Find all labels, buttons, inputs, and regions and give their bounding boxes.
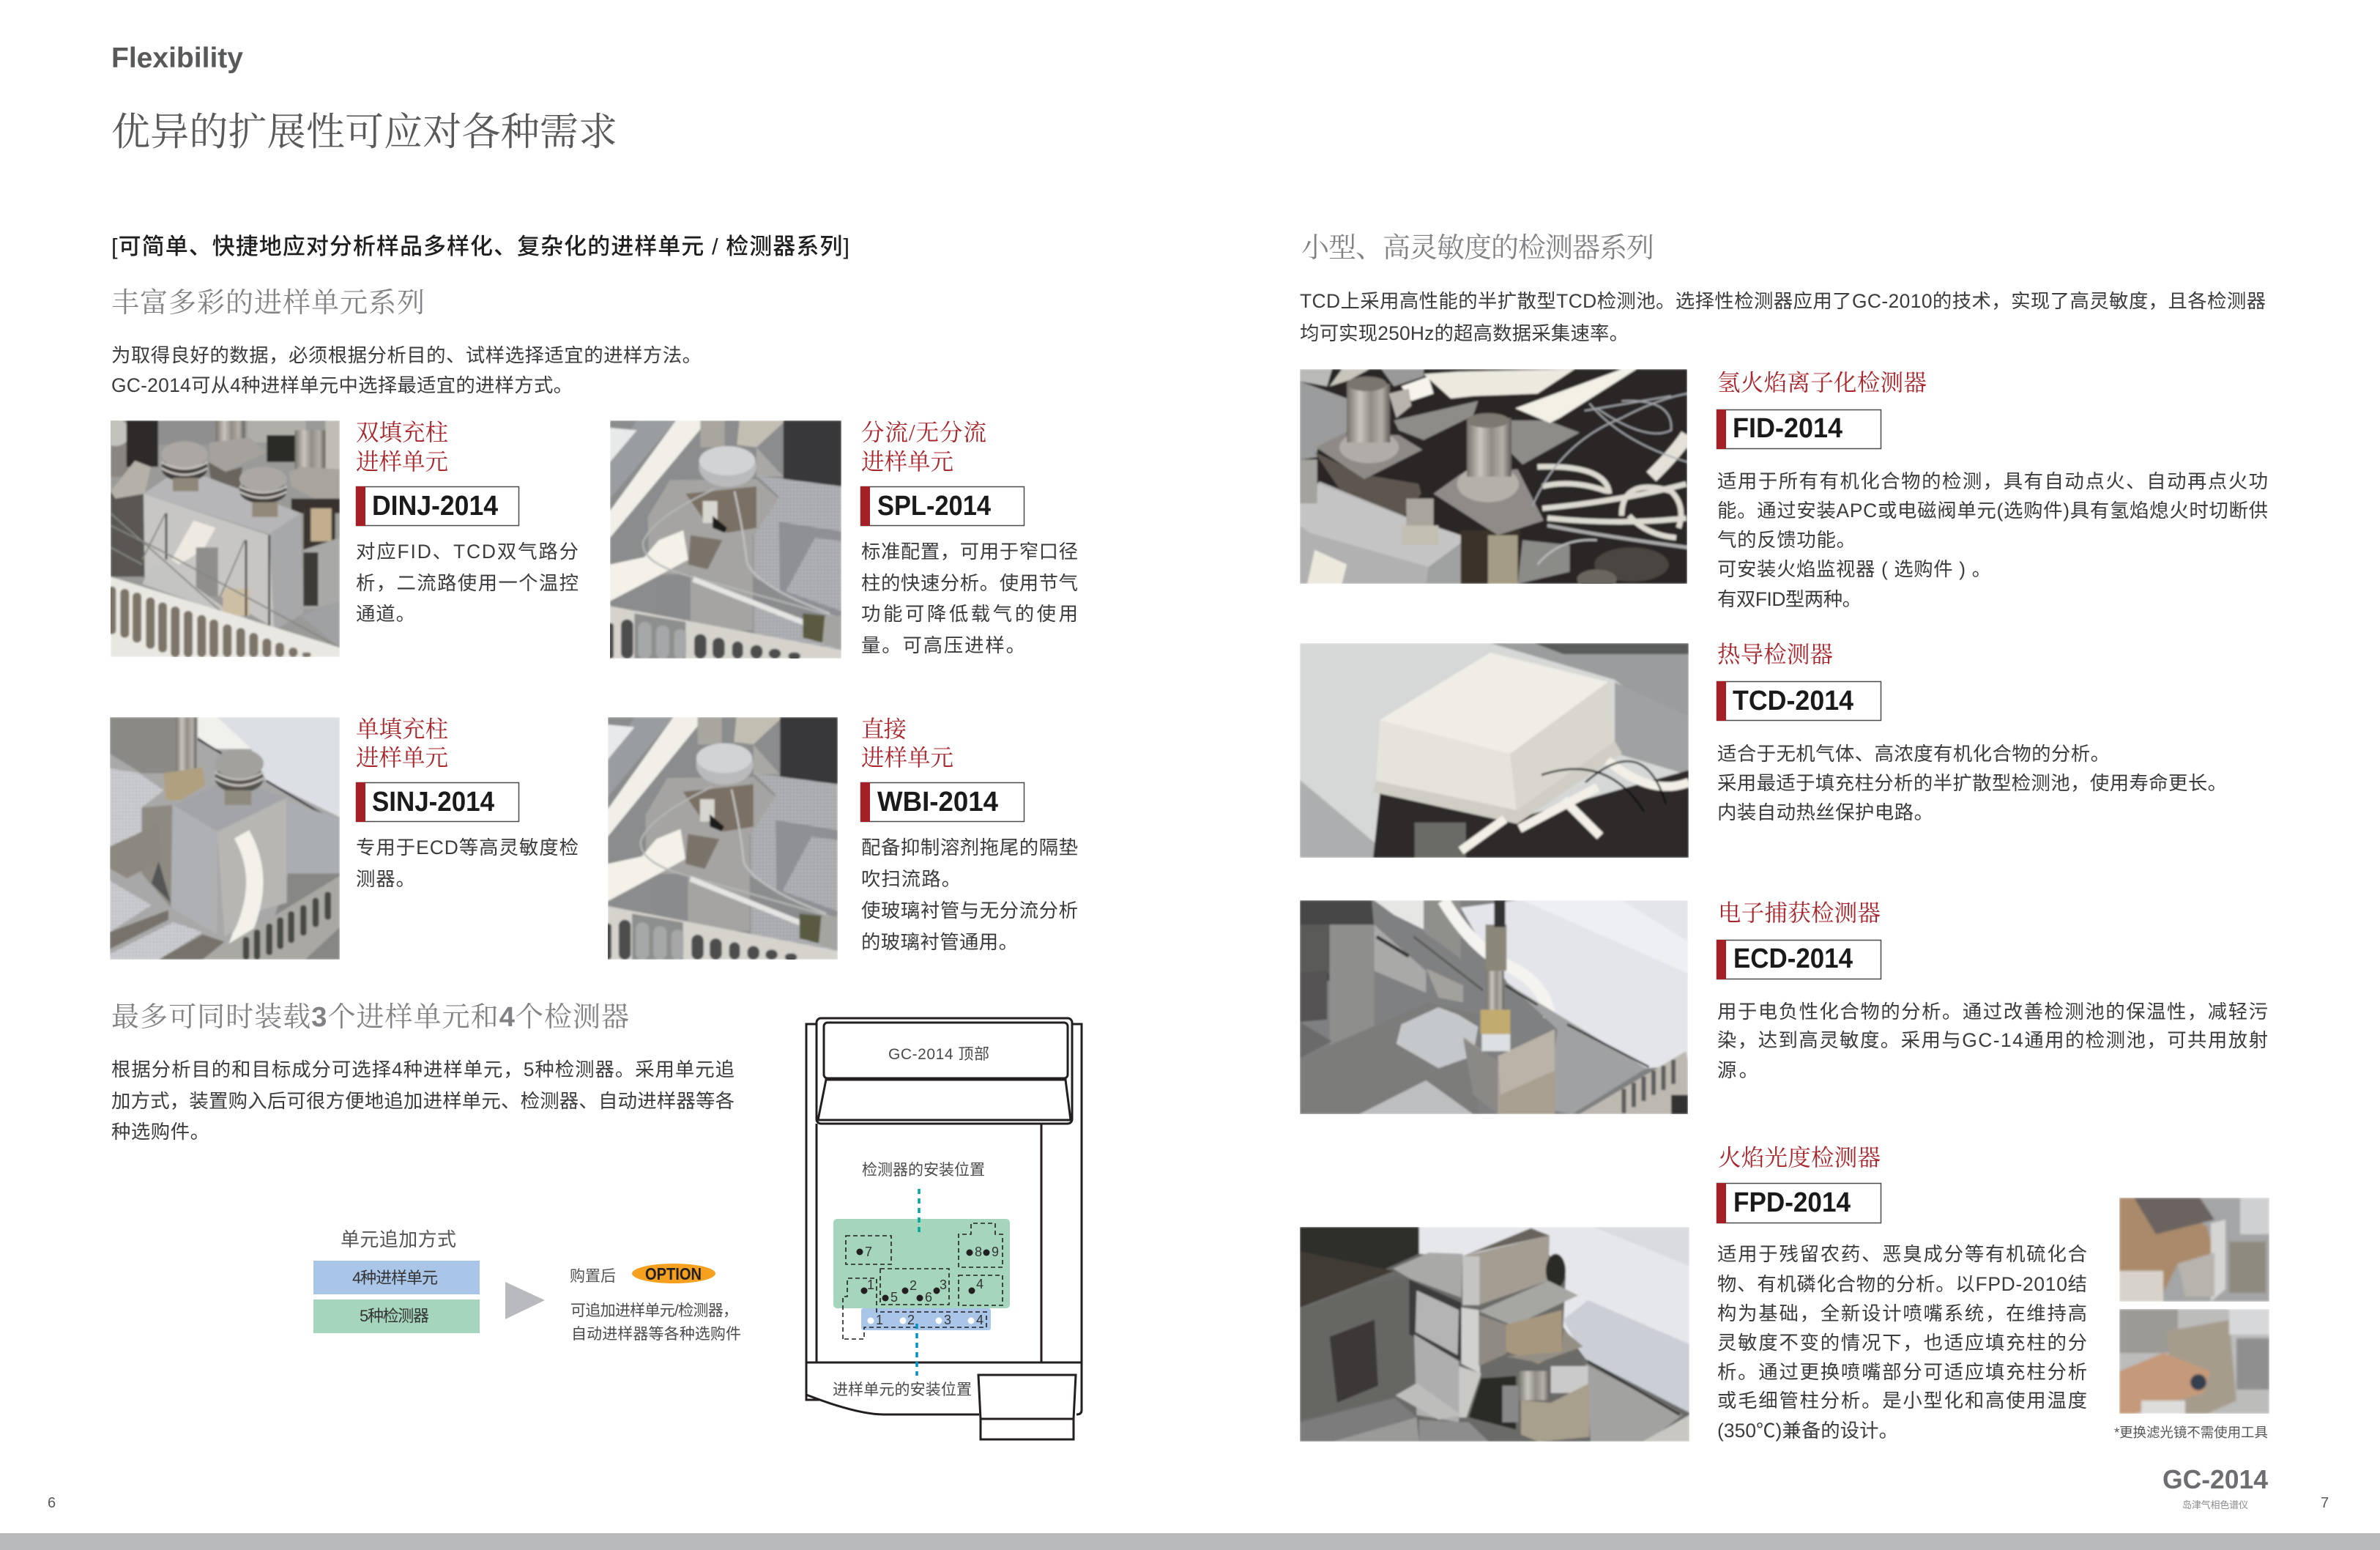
product name: 火焰光度检测器: [1718, 1145, 1881, 1171]
photo: ECD: [1300, 900, 1688, 1114]
product name: [356, 420, 448, 475]
detector area: 4: [976, 1277, 983, 1291]
product: TCD-2014: [1300, 642, 2227, 858]
photo: SPL: [610, 420, 841, 659]
product: SPL-2014: [608, 420, 1078, 660]
description: 能。通过安装APC或电磁阀单元(选购件)具有氢焰熄火时切断供: [1717, 500, 2268, 522]
main title: 优异的扩展性可应对各种需求: [111, 111, 617, 154]
bold subtitle: [可简单、快捷地应对分析样品多样化、复杂化的进样单元 / 检测器系列]: [111, 234, 849, 259]
panel: unit addition method: [313, 1228, 741, 1343]
description: 有双FID型两种。: [1717, 588, 1862, 610]
box: 5 detectors: [313, 1299, 480, 1333]
product logo: GC-2014: GC-2014: [2163, 1464, 2268, 1494]
model badge: SINJ-2014: [372, 787, 494, 817]
intro text: [111, 344, 702, 396]
description: 或毛细管柱分析。是小型化和高使用温度: [1717, 1390, 2087, 1412]
panel: injection units: [101, 288, 1078, 961]
description: 使玻璃衬管与无分流分析: [861, 900, 1078, 922]
description: 的玻璃衬管通用。: [861, 931, 1018, 953]
photo: SINJ: [110, 717, 340, 960]
product name: 分流/无分流: [861, 420, 986, 445]
arrow: [505, 1282, 545, 1319]
description: 对应FID、TCD双气路分: [356, 541, 579, 563]
panel: detectors: [1300, 233, 2269, 1442]
intro text: 为取得良好的数据，必须根据分析目的、试样选择适宜的进样方法。: [111, 344, 702, 366]
product name: 直接: [861, 716, 907, 742]
page number 6: 6: [48, 1495, 56, 1511]
description: 通道。: [356, 603, 415, 625]
description: 柱的快速分析。使用节气: [861, 572, 1078, 594]
model badge: [1717, 681, 1881, 721]
text: options: 可追加进样单元/检测器，: [570, 1302, 738, 1319]
product: FID-2014: [1300, 369, 2268, 610]
description: 析。通过更换喷嘴部分可适应填充柱分析: [1717, 1361, 2087, 1383]
text block: configuration: 种选购件。: [111, 1121, 209, 1143]
page number 7: 7: [2321, 1495, 2329, 1511]
text: options: 自动进样器等各种选购件: [571, 1326, 741, 1343]
injection unit area: 4: [976, 1313, 983, 1327]
model badge: TCD-2014: [1733, 686, 1853, 716]
model badge: [1717, 1183, 1881, 1223]
product name: 热导检测器: [1717, 642, 1833, 667]
product name: 氢火焰离子化检测器: [1717, 370, 1927, 396]
text block: configuration: 根据分析目的和目标成分可选择4种进样单元，5种检测器。采用单元追: [111, 1058, 735, 1080]
detector area: 9: [992, 1245, 999, 1259]
photo: TCD: [1300, 643, 1689, 858]
description: 量。可高压进样。: [861, 634, 1025, 656]
description: [1717, 743, 2227, 823]
intro text: TCD上采用高性能的半扩散型TCD检测池。选择性检测器应用了GC-2010的技术，实现了高灵敏度，且各检测器: [1300, 290, 2266, 312]
diagram heading: 单元追加方式: [341, 1228, 456, 1250]
heading: injection unit series: 丰富多彩的进样单元系列: [111, 288, 425, 319]
model badge: [1717, 409, 1881, 449]
model badge: WBI-2014: [877, 787, 998, 817]
description: [1717, 470, 2268, 610]
description: [1717, 1001, 2268, 1081]
model badge: [356, 486, 518, 526]
text block: configuration: [111, 1058, 735, 1143]
section label: Flexibility: Flexibility: [111, 42, 243, 74]
product subtitle: 岛津气相色谱仪: [2182, 1499, 2248, 1510]
description: 适用于所有有机化合物的检测，具有自动点火、自动再点火功: [1717, 470, 2268, 492]
description: 灵敏度不变的情况下，也适应填充柱的分: [1717, 1332, 2087, 1354]
intro text: GC-2014可从4种进样单元中选择最适宜的进样方式。: [111, 374, 573, 396]
intro text: [1300, 290, 2266, 344]
label: injection unit positions: 进样单元的安装位置: [833, 1382, 972, 1398]
label: detector positions: 检测器的安装位置: [862, 1162, 985, 1179]
injection unit area: 3: [944, 1313, 951, 1327]
instrument outline: [806, 1018, 1082, 1439]
text: options: [570, 1302, 741, 1343]
model badge: [356, 782, 518, 822]
description: 适用于残留农药、恶臭成分等有机硫化合: [1717, 1243, 2087, 1265]
description: 配备抑制溶剂拖尾的隔垫: [861, 837, 1078, 859]
photo: DINJ: [111, 420, 340, 657]
injection unit area: 1: [876, 1313, 883, 1327]
photo: filter change 2: [2119, 1309, 2269, 1414]
description: 可安装火焰监视器 ( 选购件 ) 。: [1717, 558, 1991, 580]
description: 物、有机磷化合物的分析。以FPD-2010结: [1717, 1273, 2087, 1295]
photo: WBI: [608, 717, 838, 960]
detector area: [833, 1189, 1010, 1308]
description: 功能可降低载气的使用: [861, 603, 1078, 625]
text: after purchase: 购置后: [570, 1268, 616, 1285]
product name: 进样单元: [356, 449, 448, 475]
description: [356, 837, 579, 890]
model badge: FPD-2014: [1733, 1187, 1851, 1218]
model badge: FID-2014: [1733, 413, 1842, 444]
description: 专用于ECD等高灵敏度检: [356, 837, 579, 859]
description: 适合于无机气体、高浓度有机化合物的分析。: [1717, 743, 2110, 765]
model badge: ECD-2014: [1733, 943, 1853, 974]
product name: 进样单元: [861, 449, 953, 475]
box: 4 injection units: [313, 1261, 480, 1294]
injection unit area: 2: [907, 1313, 915, 1327]
description: 用于电负性化合物的分析。通过改善检测池的保温性，减轻污: [1717, 1001, 2268, 1023]
product name: [861, 420, 986, 475]
photo: FPD: [1300, 1227, 1689, 1442]
intro text: 均可实现250Hz的超高数据采集速率。: [1300, 322, 1629, 344]
product name: 电子捕获检测器: [1718, 900, 1881, 926]
description: 染，达到高灵敏度。采用与GC-14通用的检测池，可共用放射: [1717, 1029, 2268, 1051]
detector area: 2: [910, 1278, 917, 1293]
product name: [861, 716, 953, 771]
photo: filter change 1: [2119, 1198, 2269, 1302]
footer bar: [0, 1533, 2380, 1550]
box: 5 detectors: 5种检测器: [360, 1307, 429, 1325]
product: WBI-2014: [606, 716, 1078, 961]
product name: 进样单元: [356, 745, 448, 771]
injection unit area: [843, 1278, 991, 1376]
product name: [356, 716, 448, 771]
product name: 单填充柱: [356, 716, 448, 742]
text block: configuration: 加方式，装置购入后可很方便地追加进样单元、检测器、自动进样器等各: [111, 1090, 735, 1112]
diagram: GC-2014 top view: [806, 1018, 1082, 1439]
badge: option: OPTION: [645, 1264, 702, 1283]
product: DINJ-2014: [101, 419, 579, 657]
detector area: 5: [890, 1290, 898, 1305]
description: 内装自动热丝保护电路。: [1717, 801, 1933, 823]
label: GC-2014 top: GC-2014 顶部: [888, 1046, 989, 1063]
detector area: 3: [940, 1278, 947, 1292]
product: ECD-2014: [1300, 900, 2268, 1114]
description: 源。: [1717, 1059, 1758, 1081]
product: FPD-2014: [1300, 1145, 2269, 1442]
model badge: [1717, 940, 1881, 979]
product name: 进样单元: [861, 745, 953, 771]
detector area: 8: [975, 1245, 982, 1259]
photo: FID: [1300, 369, 1687, 584]
description: (350℃)兼备的设计。: [1717, 1420, 1898, 1442]
product: SINJ-2014: [110, 716, 579, 960]
description: 构为基础，全新设计喷嘴系统，在维持高: [1717, 1302, 2087, 1324]
detector area: 7: [865, 1245, 872, 1259]
model badge: DINJ-2014: [372, 491, 498, 522]
description: [861, 541, 1078, 656]
description: 气的反馈功能。: [1717, 529, 1856, 551]
description: 吹扫流路。: [861, 868, 961, 890]
description: 标准配置，可用于窄口径: [861, 541, 1078, 563]
description: 测器。: [356, 868, 415, 890]
box: 4 injection units: 4种进样单元: [352, 1269, 438, 1287]
description: [861, 837, 1078, 953]
caption: no tools required: *更换滤光镜不需使用工具: [2114, 1425, 2268, 1440]
model badge: [860, 486, 1024, 526]
detector area: 6: [925, 1290, 932, 1305]
heading: detector series: 小型、高灵敏度的检测器系列: [1301, 233, 1654, 264]
product name: 双填充柱: [356, 420, 448, 445]
model badge: SPL-2014: [877, 491, 991, 522]
detector area: 1: [867, 1278, 874, 1292]
heading: maximum configuration: 最多可同时装载3个进样单元和4个检测器: [111, 1002, 629, 1033]
description: [356, 541, 579, 625]
description: 采用最适于填充柱分析的半扩散型检测池，使用寿命更长。: [1717, 772, 2227, 794]
description: [1717, 1243, 2087, 1442]
model badge: [860, 782, 1024, 822]
description: 析，二流路使用一个温控: [356, 572, 579, 594]
